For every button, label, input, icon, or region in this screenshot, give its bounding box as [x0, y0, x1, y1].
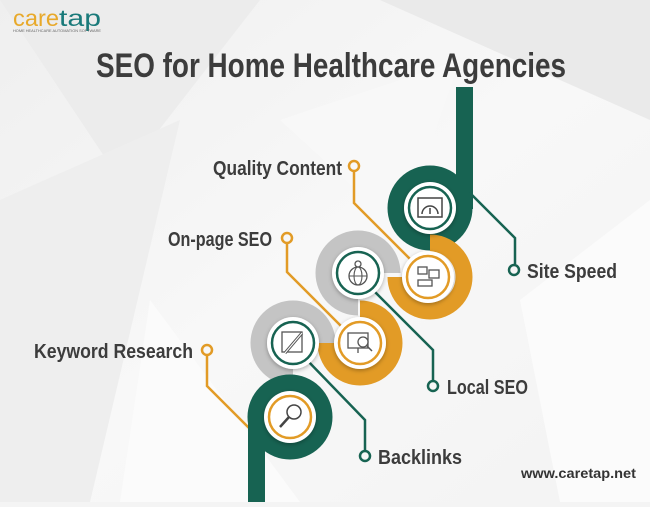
connector: local seo [373, 290, 438, 391]
icon: quality content [402, 251, 454, 303]
labels: On-page SEO [168, 229, 272, 251]
spiral track [248, 87, 473, 502]
icon: on-page seo [334, 317, 386, 369]
logo: tap [59, 5, 101, 31]
icon: keyword research [264, 391, 316, 443]
logo [13, 5, 102, 33]
labels: Backlinks [378, 447, 462, 469]
labels: Quality Content [213, 158, 342, 180]
icon: backlinks [267, 317, 319, 369]
connector: backlinks [305, 358, 370, 461]
icon: site speed [404, 182, 456, 234]
icon: local seo [332, 247, 384, 299]
connector: site speed [460, 183, 519, 275]
labels: Keyword Research [34, 341, 193, 363]
connector: keyword research [202, 345, 262, 441]
website url: www.caretap.net [520, 465, 636, 481]
logo: HOME HEALTHCARE AUTOMATION SOFTWARE [13, 29, 102, 33]
connector: on-page seo [282, 233, 342, 327]
labels [34, 158, 617, 469]
logo: care [13, 5, 59, 31]
labels: Site Speed [527, 261, 617, 283]
labels: Local SEO [447, 377, 528, 399]
connector: quality content [349, 161, 410, 259]
